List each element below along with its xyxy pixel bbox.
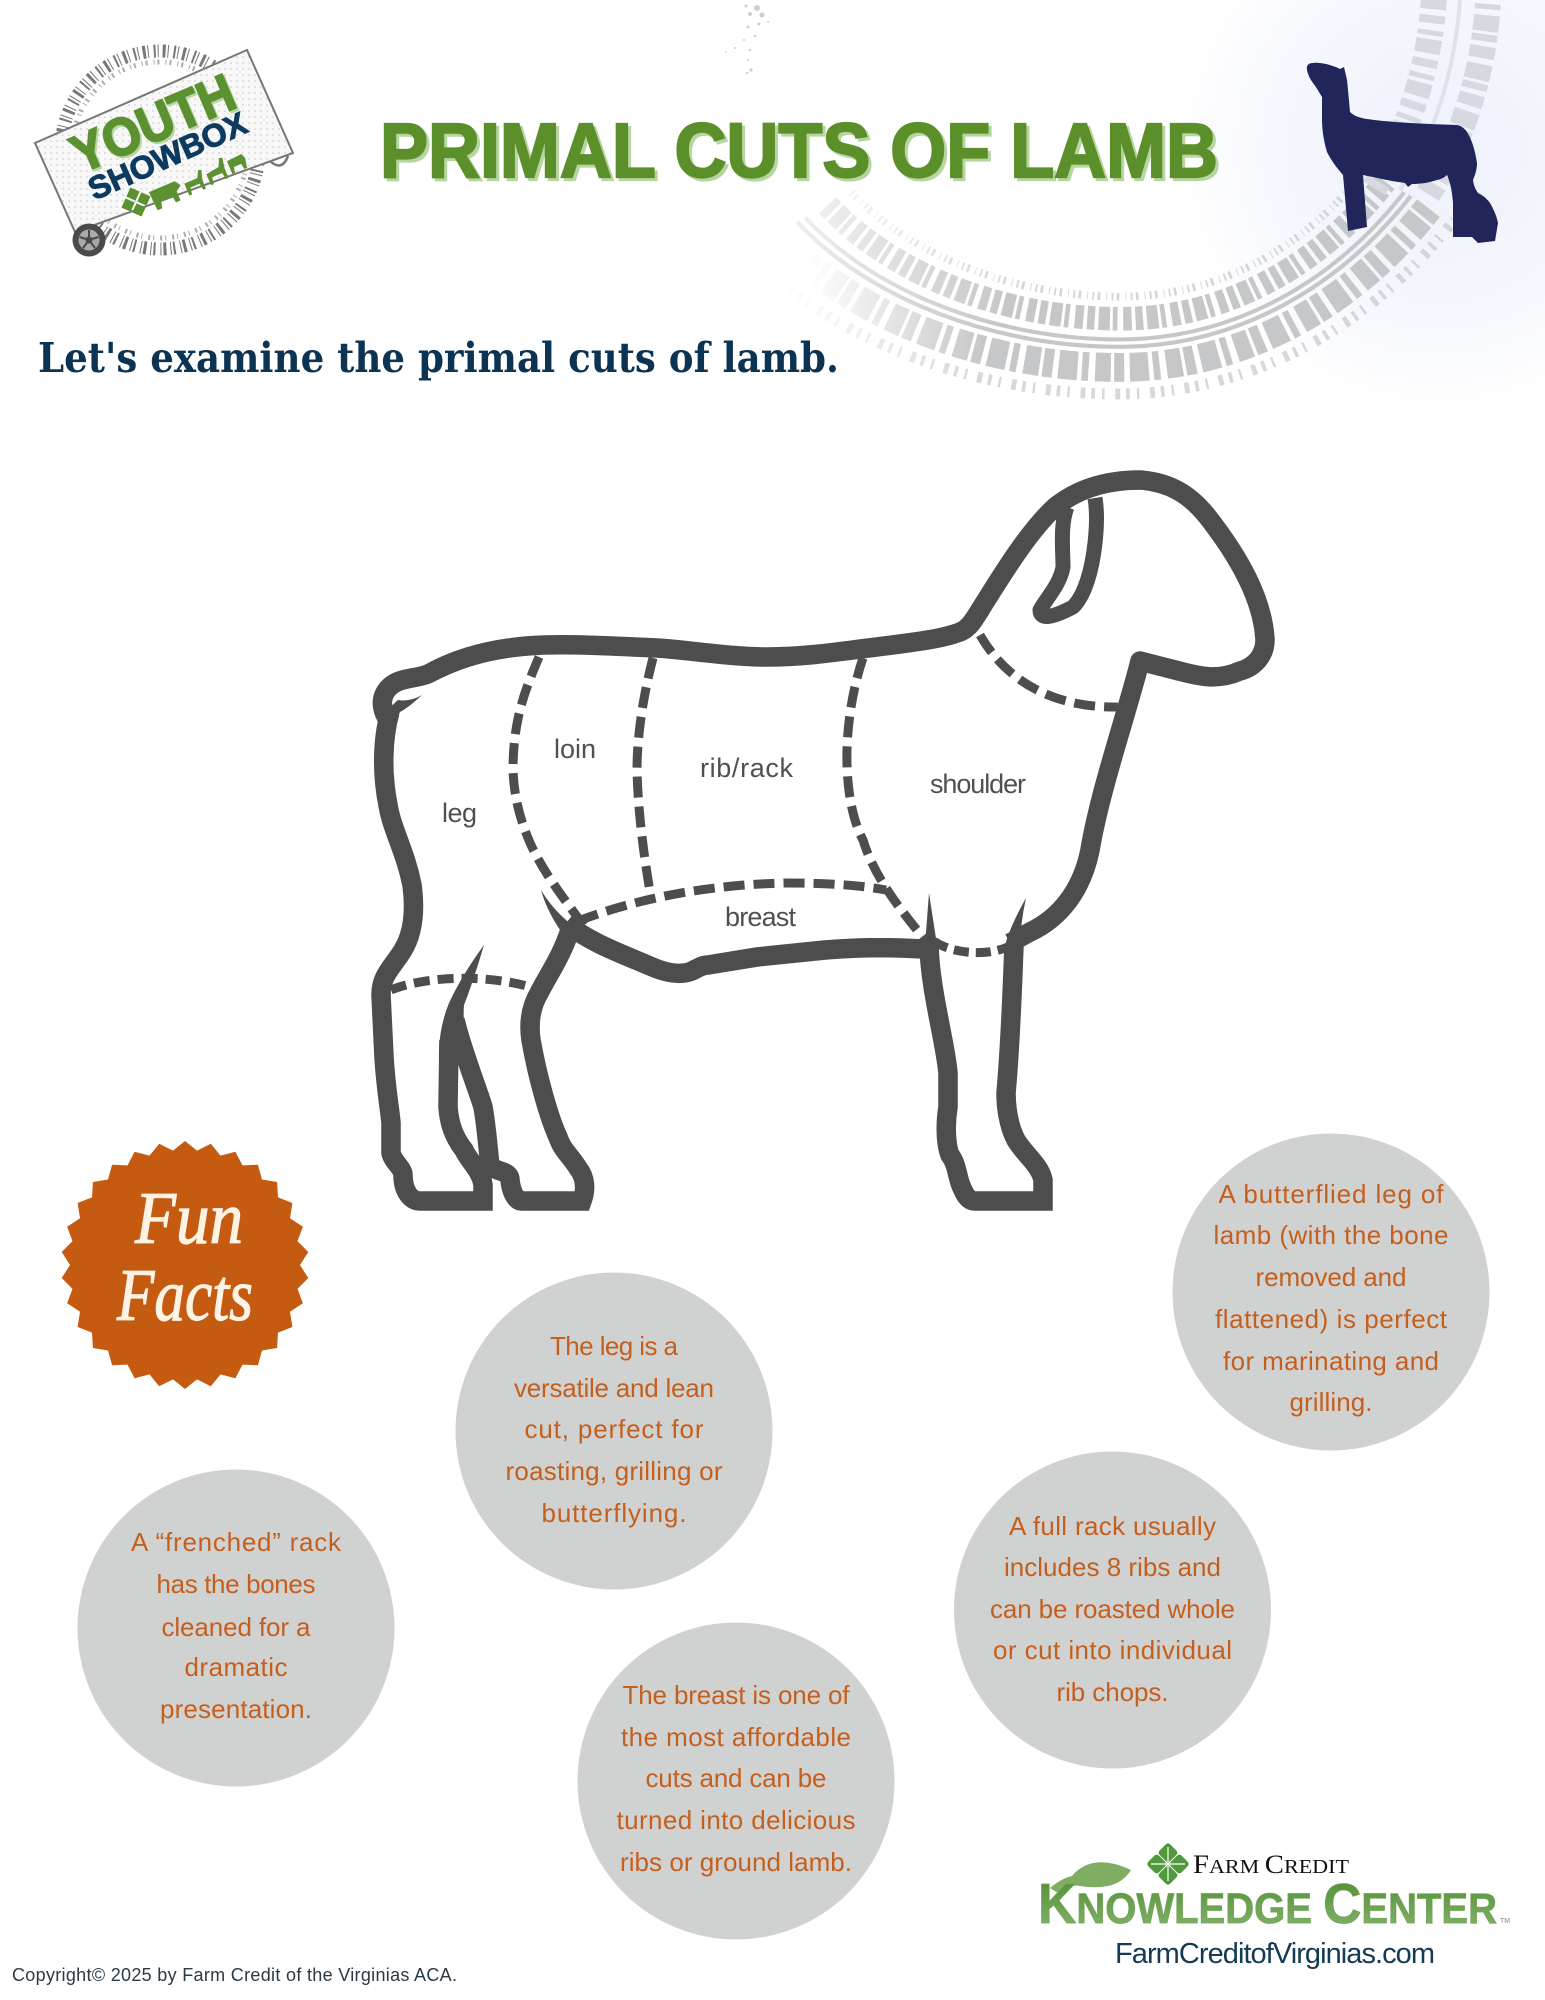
title: PRIMAL CUTS OF LAMB <box>380 108 1218 194</box>
fact circle: breast: turned into delicious <box>616 1805 856 1835</box>
Knowledge Center wordmark: KNOWLEDGE CENTER <box>1038 1872 1497 1936</box>
cut line: rib / shoulder <box>847 658 929 945</box>
lamb flank taper <box>541 890 580 938</box>
website: FarmCreditofVirginias.com <box>1115 1938 1435 1970</box>
subheading: Let's examine the primal cuts of lamb. <box>38 334 839 382</box>
badge text: Fun <box>134 1178 243 1260</box>
lamb outline: belly <box>566 923 938 973</box>
logo clover <box>121 187 151 217</box>
fact circle: breast: cuts and can be <box>646 1763 826 1793</box>
lamb front leg tapers <box>925 893 1026 950</box>
fact circle: frenched rack: has the bones <box>156 1569 316 1599</box>
fact circle: frenched rack <box>78 1470 394 1786</box>
fact circle: leg: roasting, grilling or <box>506 1456 723 1486</box>
fact circle: frenched rack: A “frenched” rack <box>131 1527 342 1557</box>
trailer wheel <box>72 224 106 256</box>
logo: Farm Credit Knowledge Center <box>1038 1842 1510 1970</box>
trailer sign <box>35 50 293 232</box>
fact circle: full rack: includes 8 ribs and <box>1004 1552 1221 1582</box>
fact circle: frenched rack: cleaned for a <box>162 1612 311 1642</box>
fact circle: butterflied leg: flattened) is perfect <box>1215 1304 1448 1334</box>
fact circle: butterflied leg: A butterflied leg of <box>1218 1179 1444 1209</box>
logo YOUTH text: YOUTH <box>62 63 244 185</box>
lamb outline: ear <box>1040 498 1096 616</box>
label: breast: breast <box>725 902 796 932</box>
fact circle: breast: The breast is one of <box>622 1680 850 1710</box>
badge starburst <box>62 1141 308 1389</box>
fact circle: breast: the most affordable <box>621 1722 851 1752</box>
logo SHOWBOX text: SHOWBOX <box>83 105 253 207</box>
fact circle: leg: The leg is a <box>550 1331 679 1361</box>
fact circle: full rack <box>954 1452 1271 1768</box>
lamb cuts diagram <box>381 480 1265 1201</box>
logo: Youth Showbox <box>35 50 293 256</box>
cut line: lower shoulder <box>934 941 1010 953</box>
fact circle: leg <box>456 1272 772 1590</box>
fact circle: butterflied leg: removed and <box>1256 1262 1406 1292</box>
fact circle: breast <box>578 1622 894 1940</box>
fact circle: butterflied leg <box>1172 1134 1490 1450</box>
copyright: Copyright© 2025 by Farm Credit of the Virginias ACA. <box>12 1965 457 1985</box>
cut line: hind shank <box>391 978 534 990</box>
lamb hind leg wedge <box>439 945 484 1060</box>
fact circle: leg: cut, perfect for <box>524 1414 704 1444</box>
badge text: Facts <box>116 1255 253 1337</box>
fact circle: frenched rack: presentation. <box>160 1694 312 1724</box>
clover icon <box>1146 1842 1190 1886</box>
background haze behind lamb <box>1170 0 1545 430</box>
cut line: loin / rib <box>637 658 653 892</box>
fact circle: leg: butterflying. <box>542 1498 686 1528</box>
cut line: neck <box>980 635 1118 707</box>
trailer hitch <box>270 156 288 165</box>
fact circle: full rack: A full rack usually <box>1009 1511 1216 1541</box>
fact circle: butterflied leg: lamb (with the bone <box>1214 1220 1448 1250</box>
title: PRIMAL CUTS OF LAMB <box>383 111 1221 197</box>
fact circle: breast: ribs or ground lamb. <box>620 1847 852 1877</box>
lamb outline: near hind leg <box>455 930 585 1201</box>
fact circle: full rack: rib chops. <box>1056 1677 1168 1707</box>
tire track speckles at top <box>725 4 769 74</box>
fact circle: leg: versatile and lean <box>514 1373 714 1403</box>
badge text <box>116 1178 253 1337</box>
label: shoulder: shoulder <box>930 769 1026 799</box>
logo YOUTH text: YOUTH <box>64 65 246 187</box>
fact circle: butterflied leg: grilling. <box>1290 1387 1372 1417</box>
logo livestock silhouettes <box>147 149 251 211</box>
tire track decoration <box>746 0 1488 394</box>
fact circle: full rack: or cut into individual <box>993 1635 1232 1665</box>
label: loin: loin <box>554 734 596 764</box>
cut line: leg / loin <box>513 657 587 930</box>
lamb tail tip <box>385 695 422 730</box>
lamb outline: rump and hind leg <box>381 712 483 1201</box>
icon: lamb silhouette <box>1307 63 1498 243</box>
fun facts badge <box>62 1141 308 1389</box>
Farm Credit wordmark: FARM CREDIT <box>1193 1850 1349 1879</box>
trademark: TM <box>1500 1918 1510 1925</box>
fact circle: butterflied leg: for marinating and <box>1223 1346 1439 1376</box>
label: rib/rack: rib/rack <box>700 753 794 783</box>
fact circle: full rack: can be roasted whole <box>990 1594 1235 1624</box>
lamb outline: front leg <box>929 945 1043 1201</box>
label: leg: leg <box>442 798 477 828</box>
fact circle: frenched rack: dramatic <box>184 1652 288 1682</box>
logo tire ring <box>61 51 259 249</box>
lamb outline: back and head <box>382 480 1265 943</box>
cut line: breast <box>578 883 886 921</box>
leaf icon <box>1050 1862 1131 1893</box>
